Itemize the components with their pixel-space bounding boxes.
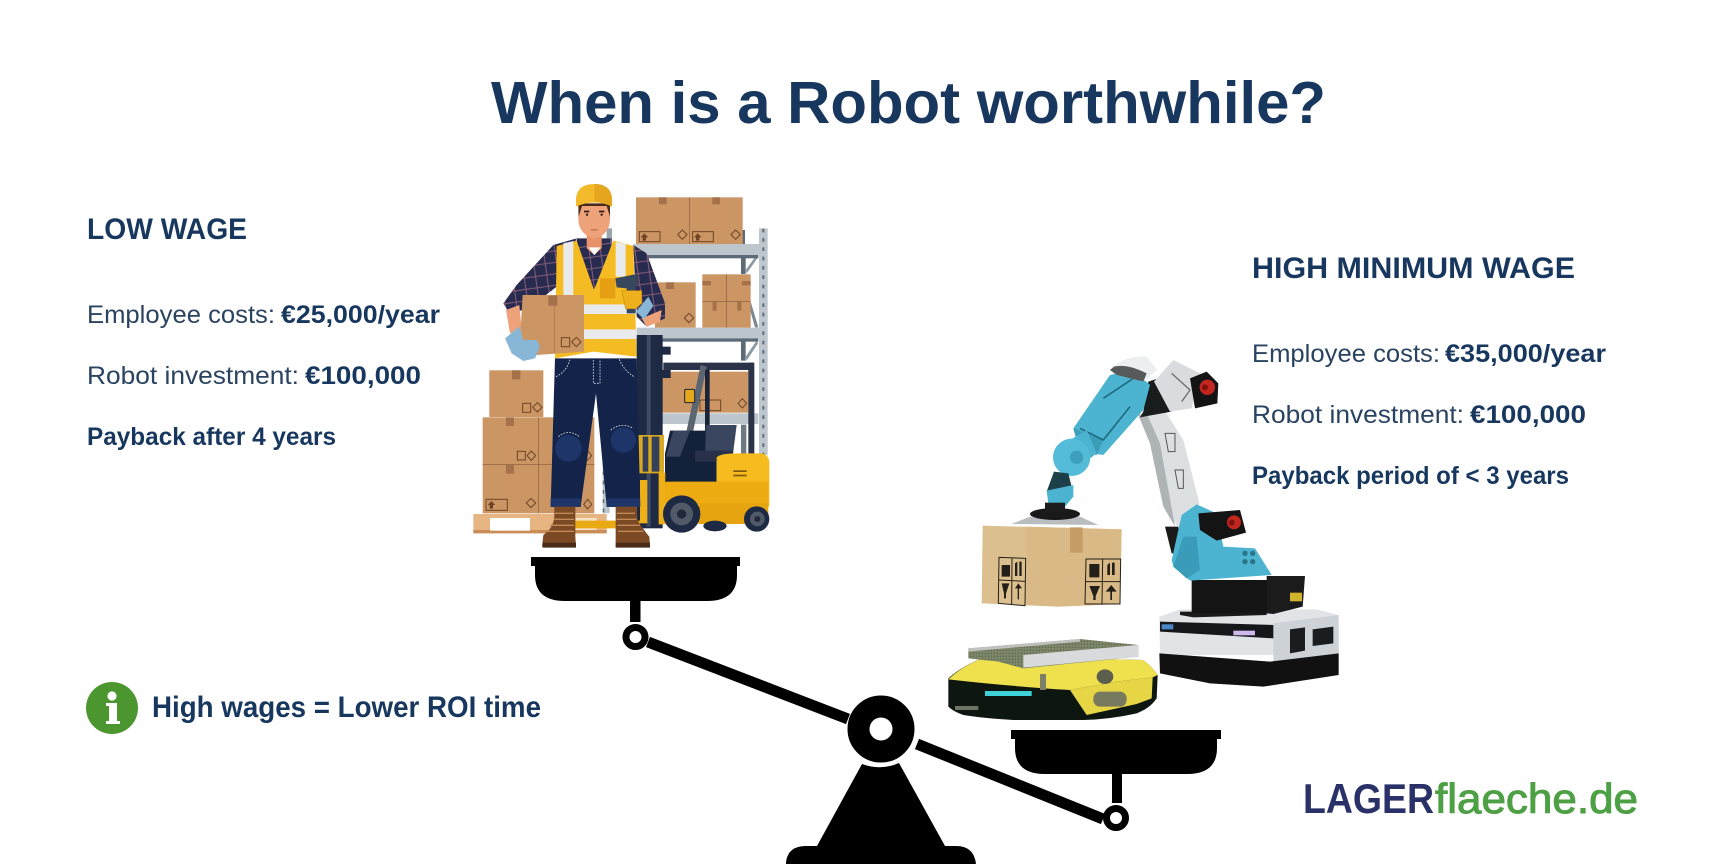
text: robot investment low: Robot investment:	[87, 362, 299, 390]
base	[786, 763, 976, 864]
left pan	[531, 557, 740, 622]
right ring	[1106, 808, 1126, 828]
upper arm	[1047, 370, 1172, 507]
hard hat	[576, 184, 612, 207]
shoulder	[1172, 504, 1272, 581]
gripper	[1012, 503, 1098, 525]
right pan	[1011, 730, 1221, 803]
legs	[551, 358, 640, 507]
text: robot investment low	[87, 362, 421, 390]
text: robot investment high: €100,000	[1470, 401, 1586, 429]
panel: high minimum wage	[1252, 252, 1606, 490]
shelving rack	[603, 228, 768, 513]
text: employee costs low: Employee costs:	[87, 301, 275, 329]
callout: high wages	[86, 682, 541, 734]
callout text: High wages = Lower ROI time	[152, 691, 541, 724]
glove left	[505, 327, 540, 361]
text: employee costs high: €35,000/year	[1445, 340, 1606, 368]
robot mobile base	[1159, 609, 1339, 687]
boxes on shelves	[636, 197, 751, 413]
beam right	[917, 744, 1103, 819]
beam left	[648, 642, 848, 719]
carried box	[519, 295, 584, 355]
text: robot investment low: €100,000	[305, 362, 421, 390]
logo: LAGER	[1303, 775, 1434, 822]
balance scale	[531, 557, 1221, 864]
heading: low wage: LOW WAGE	[87, 213, 247, 246]
logo	[1303, 775, 1638, 822]
panel: low wage	[87, 213, 440, 451]
text: employee costs low	[87, 301, 440, 329]
scanner and glove	[615, 274, 638, 313]
title: When is a Robot worthwhile?	[491, 70, 1326, 136]
hub	[858, 706, 904, 752]
text: payback low: Payback after 4 years	[87, 423, 336, 451]
text: payback high: Payback period of < 3 years	[1252, 462, 1569, 490]
text: robot investment high: Robot investment:	[1252, 401, 1464, 429]
cardboard box	[982, 526, 1122, 607]
heading: high minimum wage: HIGH MINIMUM WAGE	[1252, 252, 1575, 285]
worker	[503, 184, 665, 548]
text: employee costs low: €25,000/year	[281, 301, 440, 329]
shirt arms	[503, 238, 665, 327]
text: robot investment high	[1252, 401, 1586, 429]
robot turntable	[1180, 576, 1305, 617]
boots	[542, 507, 650, 548]
pallet with stacked boxes	[473, 370, 607, 533]
illustration: robot arm on mobile base	[948, 356, 1339, 720]
neck and face	[587, 230, 602, 255]
text: employee costs high	[1252, 340, 1606, 368]
lower arm	[1138, 408, 1199, 553]
head and red motor	[1110, 356, 1218, 412]
hi-vis vest	[555, 241, 637, 358]
left ring	[626, 628, 645, 646]
illustration: worker with shelves and forklift	[473, 184, 769, 548]
yellow AGV	[948, 639, 1158, 720]
text: employee costs high: Employee costs:	[1252, 340, 1440, 368]
logo: flaeche.de	[1435, 775, 1638, 822]
forklift	[575, 335, 769, 533]
icon: info	[86, 682, 138, 734]
